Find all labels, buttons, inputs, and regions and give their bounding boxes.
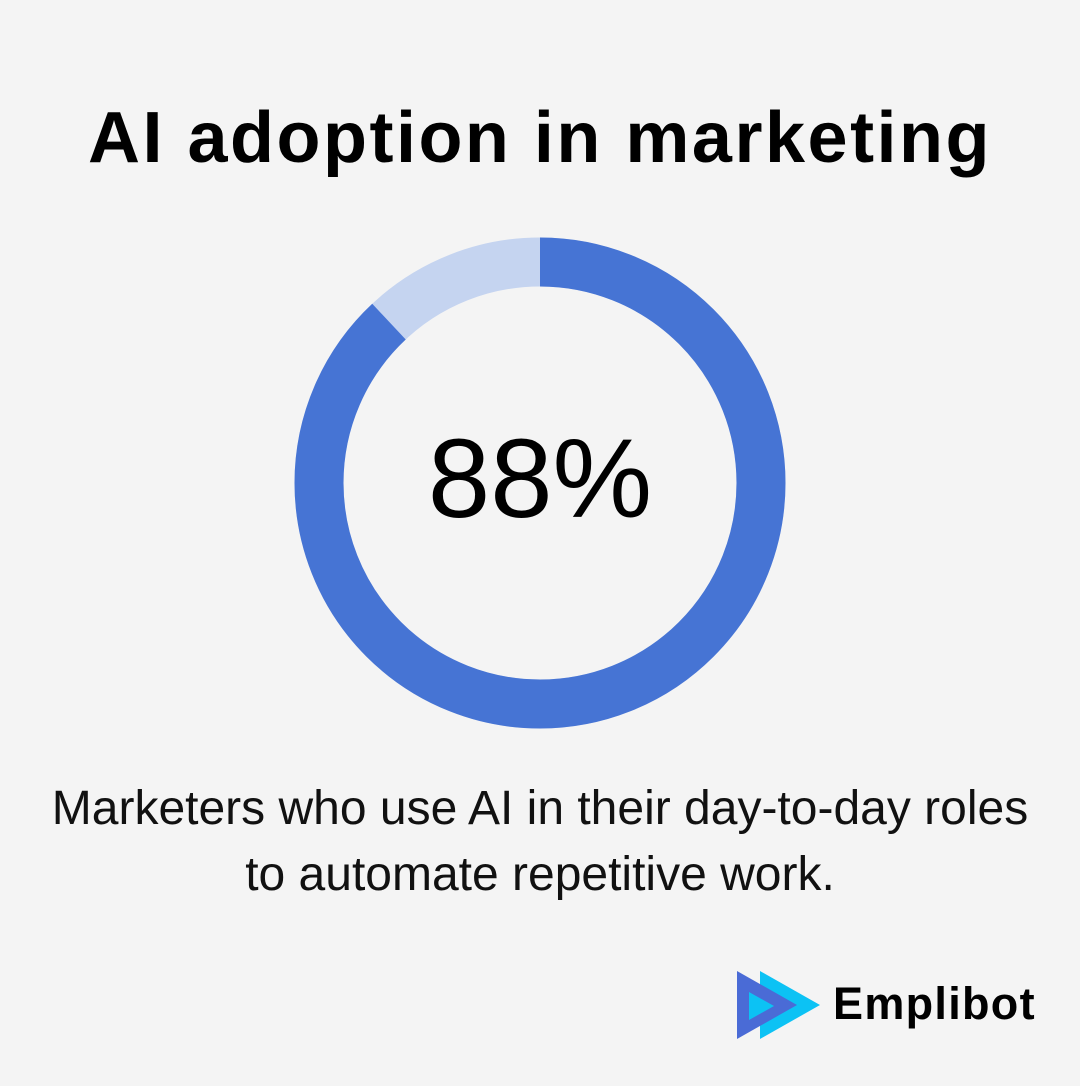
caption — [52, 782, 1028, 901]
caption: to automate repetitive work. — [245, 848, 835, 901]
icon: play triangles — [737, 971, 820, 1039]
remaining segment — [319, 262, 761, 704]
88% segment — [319, 262, 761, 704]
percentage value: 88% — [428, 416, 652, 541]
logo — [737, 971, 1036, 1039]
title: AI adoption in marketing — [88, 98, 992, 178]
brand name: Emplibot — [833, 978, 1036, 1029]
caption: Marketers who use AI in their day-to-day roles — [52, 782, 1028, 835]
